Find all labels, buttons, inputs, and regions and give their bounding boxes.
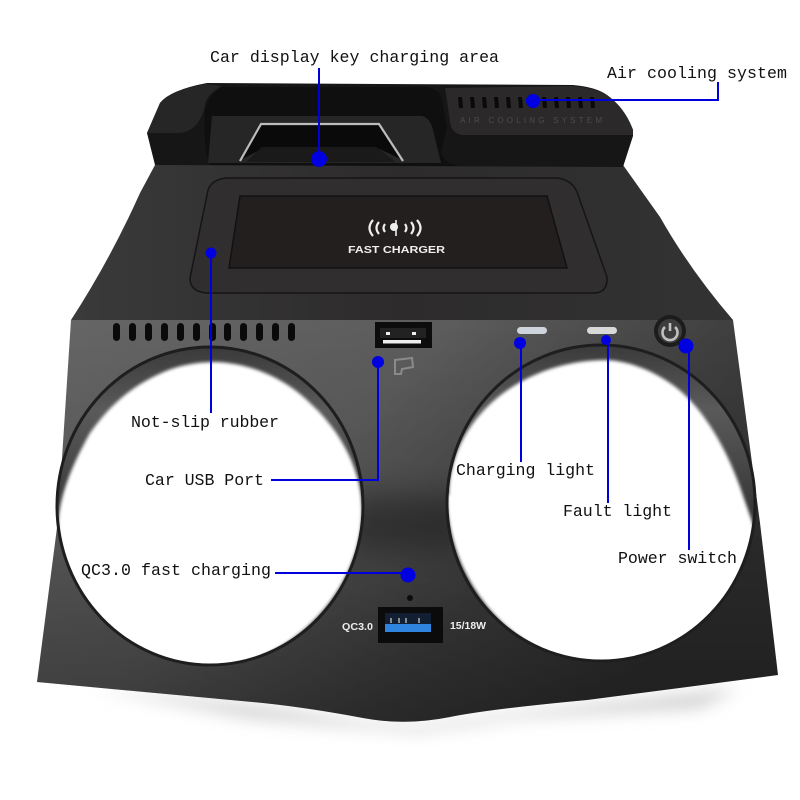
QC3.0 USB port bbox=[342, 595, 487, 643]
callout: car display key charging area bbox=[210, 48, 499, 167]
left cup holder bbox=[57, 347, 363, 668]
air cooling vents and label: AIR COOLING SYSTEM bbox=[460, 116, 602, 125]
callout: QC3.0 fast charging: QC3.0 fast charging bbox=[81, 561, 271, 580]
callout: power switch: Power switch bbox=[618, 549, 737, 568]
callout: QC3.0 fast charging bbox=[81, 561, 416, 582]
key recess bbox=[205, 87, 463, 166]
faceplate lower shading bbox=[37, 320, 778, 722]
rear tray bbox=[147, 83, 633, 167]
charging light bbox=[517, 327, 547, 334]
fast charger label: FAST CHARGER bbox=[348, 245, 446, 256]
QC3.0 USB port: 15/18W bbox=[450, 621, 487, 632]
upper deck bbox=[71, 165, 733, 320]
callout: fault light bbox=[563, 335, 672, 521]
QC3.0 USB port: QC3.0 bbox=[342, 622, 373, 633]
callout: fault light: Fault light bbox=[563, 502, 672, 521]
left vents bbox=[113, 323, 295, 341]
power button bbox=[654, 315, 686, 347]
drop shadow bbox=[90, 688, 740, 732]
air cooling vents and label bbox=[458, 97, 602, 125]
callout: not-slip rubber bbox=[131, 248, 279, 432]
callout: air cooling system: Air cooling system bbox=[607, 64, 787, 83]
callout: car display key charging area: Car display key charging area bbox=[210, 48, 499, 67]
wireless charging icon bbox=[370, 220, 420, 236]
callout: car USB port bbox=[145, 356, 384, 490]
callout: not-slip rubber: Not-slip rubber bbox=[131, 413, 279, 432]
centre shading band bbox=[345, 495, 465, 550]
key charging cradle bbox=[240, 123, 403, 162]
P gear mark bbox=[395, 358, 413, 374]
callout: power switch bbox=[618, 338, 737, 568]
left block top bbox=[147, 84, 222, 133]
right block top bbox=[445, 86, 633, 135]
charger body bbox=[37, 83, 778, 732]
fault light bbox=[587, 327, 617, 334]
callout: charging light: Charging light bbox=[456, 461, 595, 480]
callout: charging light bbox=[456, 337, 595, 480]
callout: car USB port: Car USB Port bbox=[145, 471, 264, 490]
car USB port bbox=[375, 322, 432, 348]
callout: air cooling system bbox=[526, 64, 787, 108]
right cup holder bbox=[447, 345, 756, 666]
lower faceplate bbox=[37, 320, 778, 722]
wireless charging pad bbox=[190, 178, 607, 293]
